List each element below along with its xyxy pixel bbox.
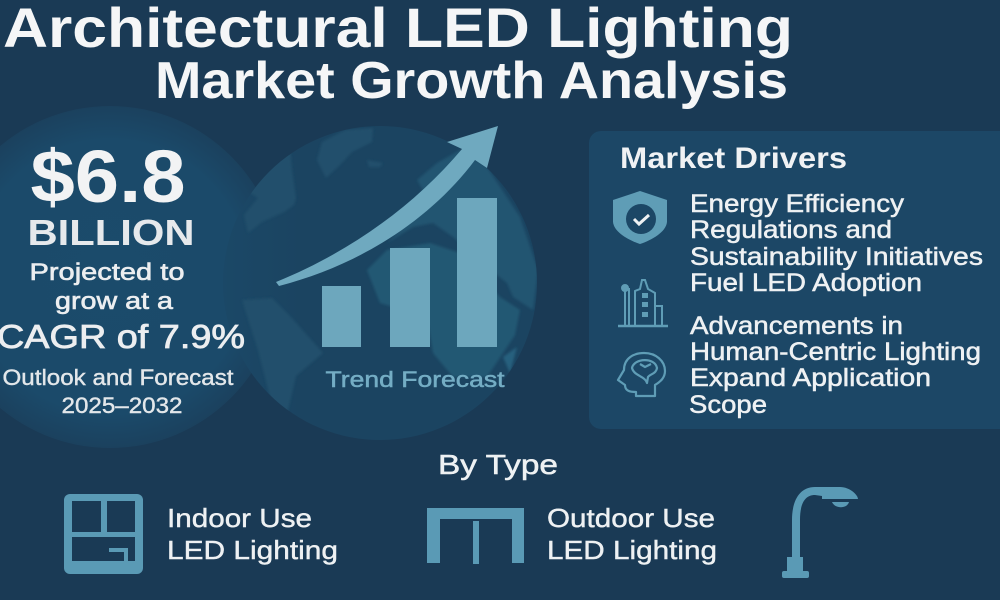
indoor label: LED Lighting xyxy=(167,535,338,565)
driver 1 text: Energy Efficiency xyxy=(690,190,905,218)
indoor label xyxy=(167,503,338,565)
outdoor label: LED Lighting xyxy=(547,535,717,565)
outdoor label xyxy=(547,503,717,565)
panel heading: Market Drivers xyxy=(620,142,847,175)
driver 2 text xyxy=(689,312,981,419)
title xyxy=(3,0,793,110)
forecast period xyxy=(2,365,234,418)
icon: shield check xyxy=(613,191,667,244)
indoor label: Indoor Use xyxy=(167,503,312,533)
forecast period: Outlook and Forecast xyxy=(2,365,234,390)
left stat circle xyxy=(0,106,281,448)
forecast period: 2025–2032 xyxy=(62,393,182,418)
icon: city buildings xyxy=(618,280,668,326)
driver 1 text: Sustainability Initiatives xyxy=(690,243,983,271)
globe with world map xyxy=(223,126,538,440)
chart label: Trend Forecast xyxy=(326,367,504,392)
growth text: Projected to xyxy=(30,259,184,286)
icon: indoor floor plan xyxy=(64,494,143,574)
title: Market Growth Analysis xyxy=(155,52,788,110)
growth arrow xyxy=(276,126,498,286)
bar chart xyxy=(322,198,497,347)
section heading: by type: By Type xyxy=(438,449,558,480)
growth text xyxy=(0,259,245,355)
stat value: $6.8 xyxy=(30,135,186,218)
panel: market drivers xyxy=(589,131,1000,429)
growth text: CAGR of 7.9% xyxy=(0,318,245,355)
outdoor label: Outdoor Use xyxy=(547,503,715,533)
growth text: grow at a xyxy=(55,288,174,315)
driver 1 text xyxy=(690,190,983,297)
driver 2 text: Human-Centric Lighting xyxy=(690,338,981,366)
icon: human head with brain xyxy=(618,353,665,396)
driver 2 text: Advancements in xyxy=(690,312,903,340)
driver 2 text: Scope xyxy=(689,391,767,419)
icon: outdoor gate xyxy=(427,508,524,564)
icon: street lamp xyxy=(782,487,858,578)
driver 2 text: Expand Application xyxy=(690,364,931,392)
driver 1 text: Fuel LED Adoption xyxy=(690,269,922,297)
stat unit: BILLION xyxy=(28,212,194,253)
driver 1 text: Regulations and xyxy=(690,216,892,244)
